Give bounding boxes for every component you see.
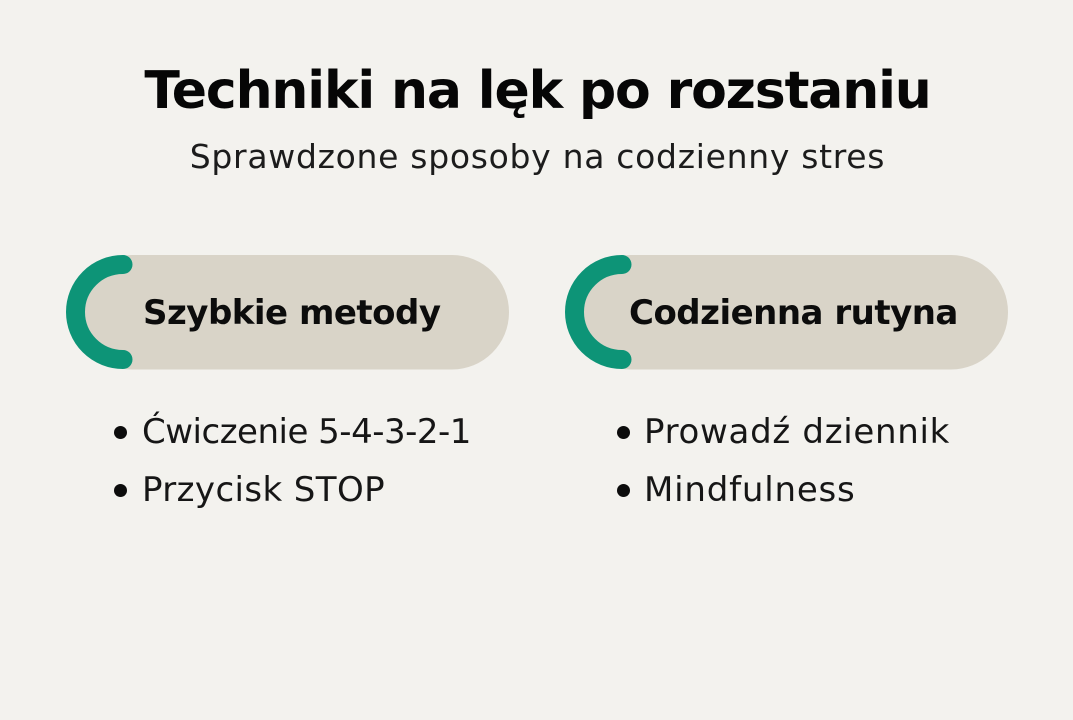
subtitle: Sprawdzone sposoby na codzienny stres [190,137,885,176]
heading: daily routine: Codzienna rutyna [629,293,958,333]
title: Techniki na lęk po rozstaniu [144,61,931,121]
list item: STOP button: Przycisk STOP [142,470,385,510]
list item: 5-4-3-2-1 exercise: Ćwiczenie 5-4-3-2-1 [142,412,471,452]
panel: daily routine header [565,255,1008,370]
list item: mindfulness: Mindfulness [644,470,856,510]
heading: quick methods: Szybkie metody [143,293,441,333]
list: quick methods [114,412,471,510]
panel: quick methods header [66,255,509,370]
list: daily routine [617,412,950,510]
list item: journal: Prowadź dziennik [644,412,950,452]
